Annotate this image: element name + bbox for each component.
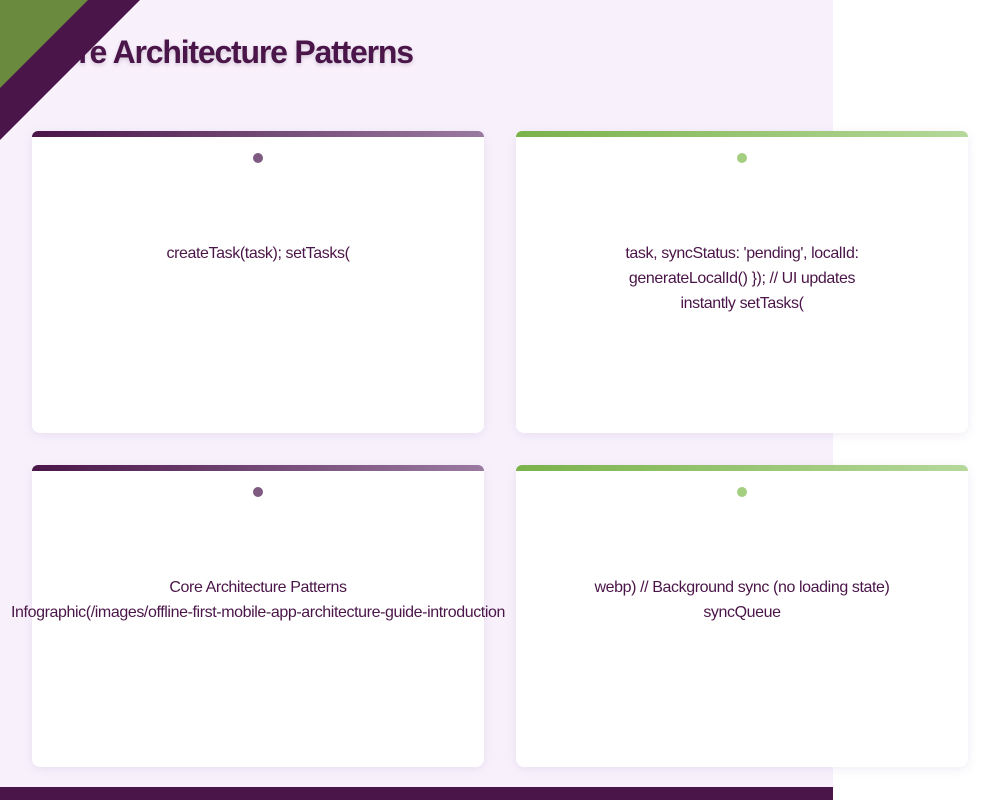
panel: card 4 — [516, 465, 968, 767]
text: card 1: createTask(task); setTasks( — [166, 245, 350, 262]
text: card 2: task, syncStatus: 'pending', localId: generateLocalId() }); // UI updates instantly setTasks( — [625, 245, 859, 312]
footer bar — [0, 787, 833, 800]
panel: card 1 — [32, 131, 484, 433]
panel: card 2 — [516, 131, 968, 433]
panel: card 3 — [32, 465, 484, 767]
corner decoration — [0, 0, 140, 140]
text: card 3: Core Architecture Patterns Infographic(/images/offline-first-mobile-app-architecture-guide-introduction — [11, 579, 505, 621]
text: card 4: webp) // Background sync (no loading state) syncQueue — [594, 579, 889, 621]
title: Core Architecture Patterns — [38, 34, 413, 70]
